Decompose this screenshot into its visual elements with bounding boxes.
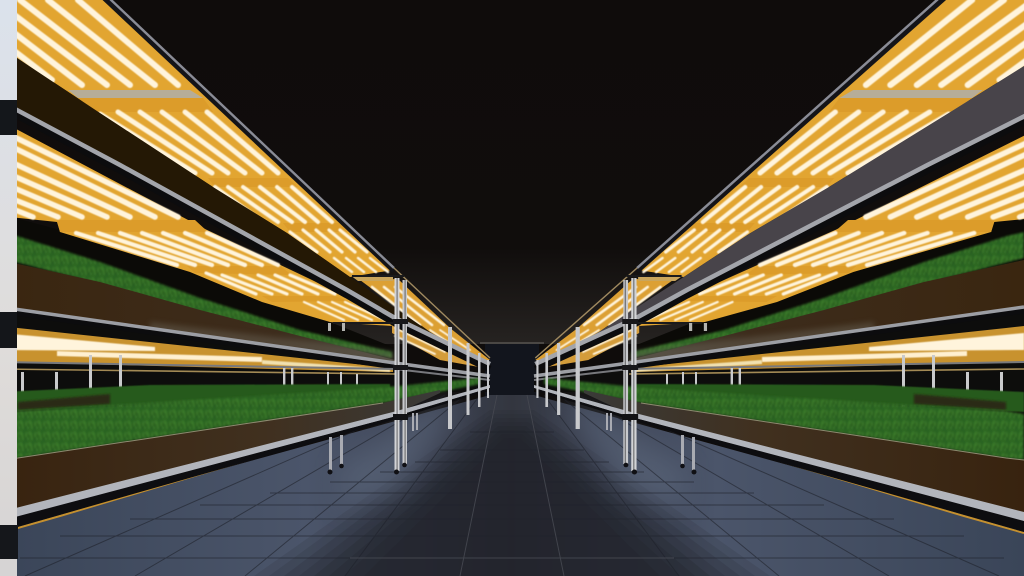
floor tile lines [20,395,1004,576]
floor light patch left [340,400,465,505]
far wall [485,344,539,396]
floor light patch right [559,400,684,505]
floor centre shadow [254,410,770,576]
horizon line [480,342,544,344]
right upper lights and beam [535,0,1024,369]
right posts [536,275,707,474]
left posts [328,275,489,474]
left upper lights and beam [0,0,490,369]
left lower shelves [0,214,490,533]
right lower shelves [534,214,1024,533]
ceiling background [0,0,1024,344]
foreground pole [0,0,18,576]
floor [0,395,1024,576]
